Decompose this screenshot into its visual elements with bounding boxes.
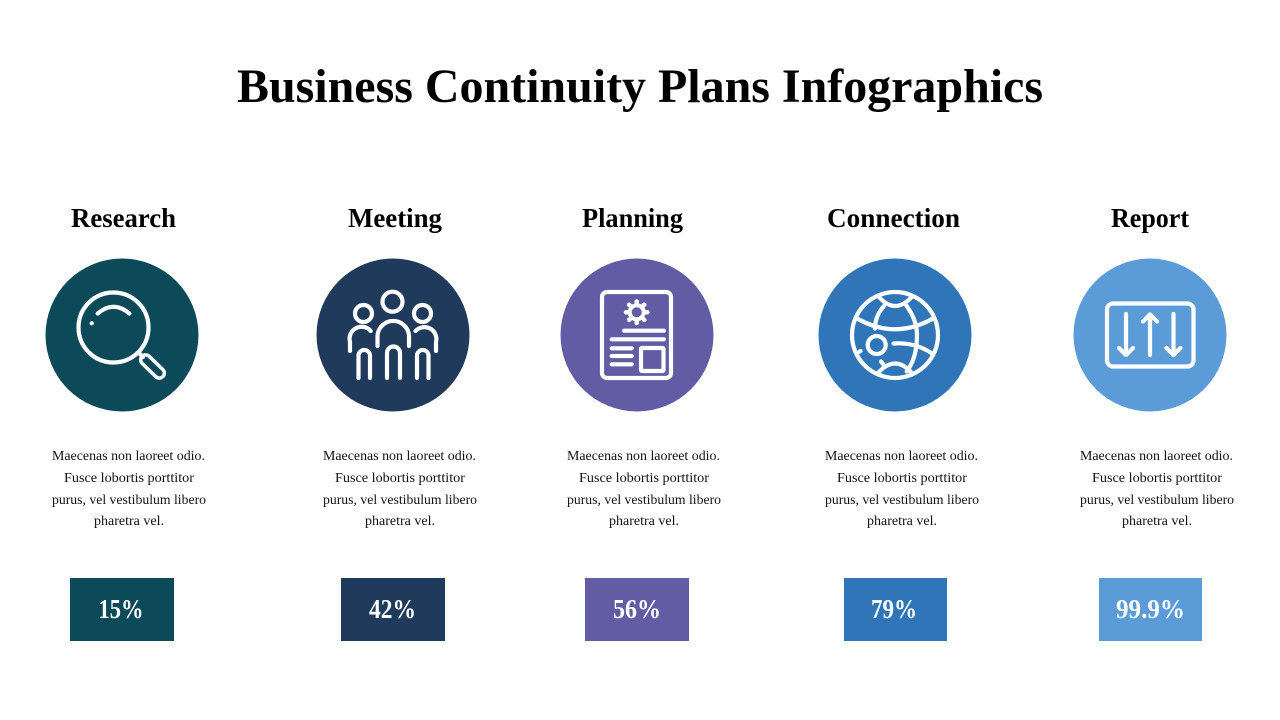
heading: report: Report [1111, 203, 1189, 233]
description: research: Maecenas non laoreet odio. [52, 449, 205, 464]
description: report: pharetra vel. [1122, 514, 1192, 529]
icon: magnifying glass [46, 258, 198, 412]
value box: 56%: 56% [613, 594, 661, 624]
description: connection: Maecenas non laoreet odio. [825, 449, 978, 464]
description: research: purus, vel vestibulum libero [52, 493, 206, 508]
description: connection: purus, vel vestibulum libero [825, 493, 979, 508]
panel: meeting [316, 203, 477, 641]
icon: globe with pin [818, 258, 972, 412]
description: meeting: Fusce lobortis porttitor [335, 471, 465, 486]
description: research [52, 449, 206, 529]
description: planning: purus, vel vestibulum libero [567, 493, 721, 508]
icon: document with gear [560, 258, 714, 412]
description: report: purus, vel vestibulum libero [1080, 493, 1234, 508]
icon: arrows in a frame [1074, 258, 1226, 412]
description: report: Maecenas non laoreet odio. [1080, 449, 1233, 464]
panel: connection [818, 203, 979, 641]
value box: 15% [70, 578, 174, 641]
heading: connection: Connection [827, 203, 960, 233]
value box: 42% [341, 578, 445, 641]
heading: meeting: Meeting [348, 203, 442, 233]
description: report [1080, 449, 1234, 529]
description: meeting: pharetra vel. [365, 514, 435, 529]
description: research: Fusce lobortis porttitor [64, 471, 194, 486]
description: planning: Maecenas non laoreet odio. [567, 449, 720, 464]
panel: planning [560, 203, 721, 641]
description: planning: Fusce lobortis porttitor [579, 471, 709, 486]
description: research: pharetra vel. [94, 514, 164, 529]
description: report: Fusce lobortis porttitor [1092, 471, 1222, 486]
panel: report [1074, 203, 1234, 641]
description: meeting: purus, vel vestibulum libero [323, 493, 477, 508]
panel: research [46, 203, 206, 641]
value box: 79% [844, 578, 947, 641]
value box: 15%: 15% [98, 594, 144, 624]
description: planning [567, 449, 721, 529]
value box: 79%: 79% [871, 594, 917, 624]
value box: 99.9%: 99.9% [1116, 594, 1185, 624]
description: connection [825, 449, 979, 529]
description: connection: pharetra vel. [867, 514, 937, 529]
value box: 99.9% [1099, 578, 1202, 641]
value box: 42%: 42% [369, 594, 416, 624]
heading: research: Research [71, 203, 176, 233]
value box: 56% [585, 578, 689, 641]
description: connection: Fusce lobortis porttitor [837, 471, 967, 486]
title: Business Continuity Plans Infographics [237, 60, 1043, 113]
description: planning: pharetra vel. [609, 514, 679, 529]
heading: planning: Planning [582, 203, 683, 233]
icon: group of people [316, 258, 470, 412]
description: meeting [323, 449, 477, 529]
description: meeting: Maecenas non laoreet odio. [323, 449, 476, 464]
